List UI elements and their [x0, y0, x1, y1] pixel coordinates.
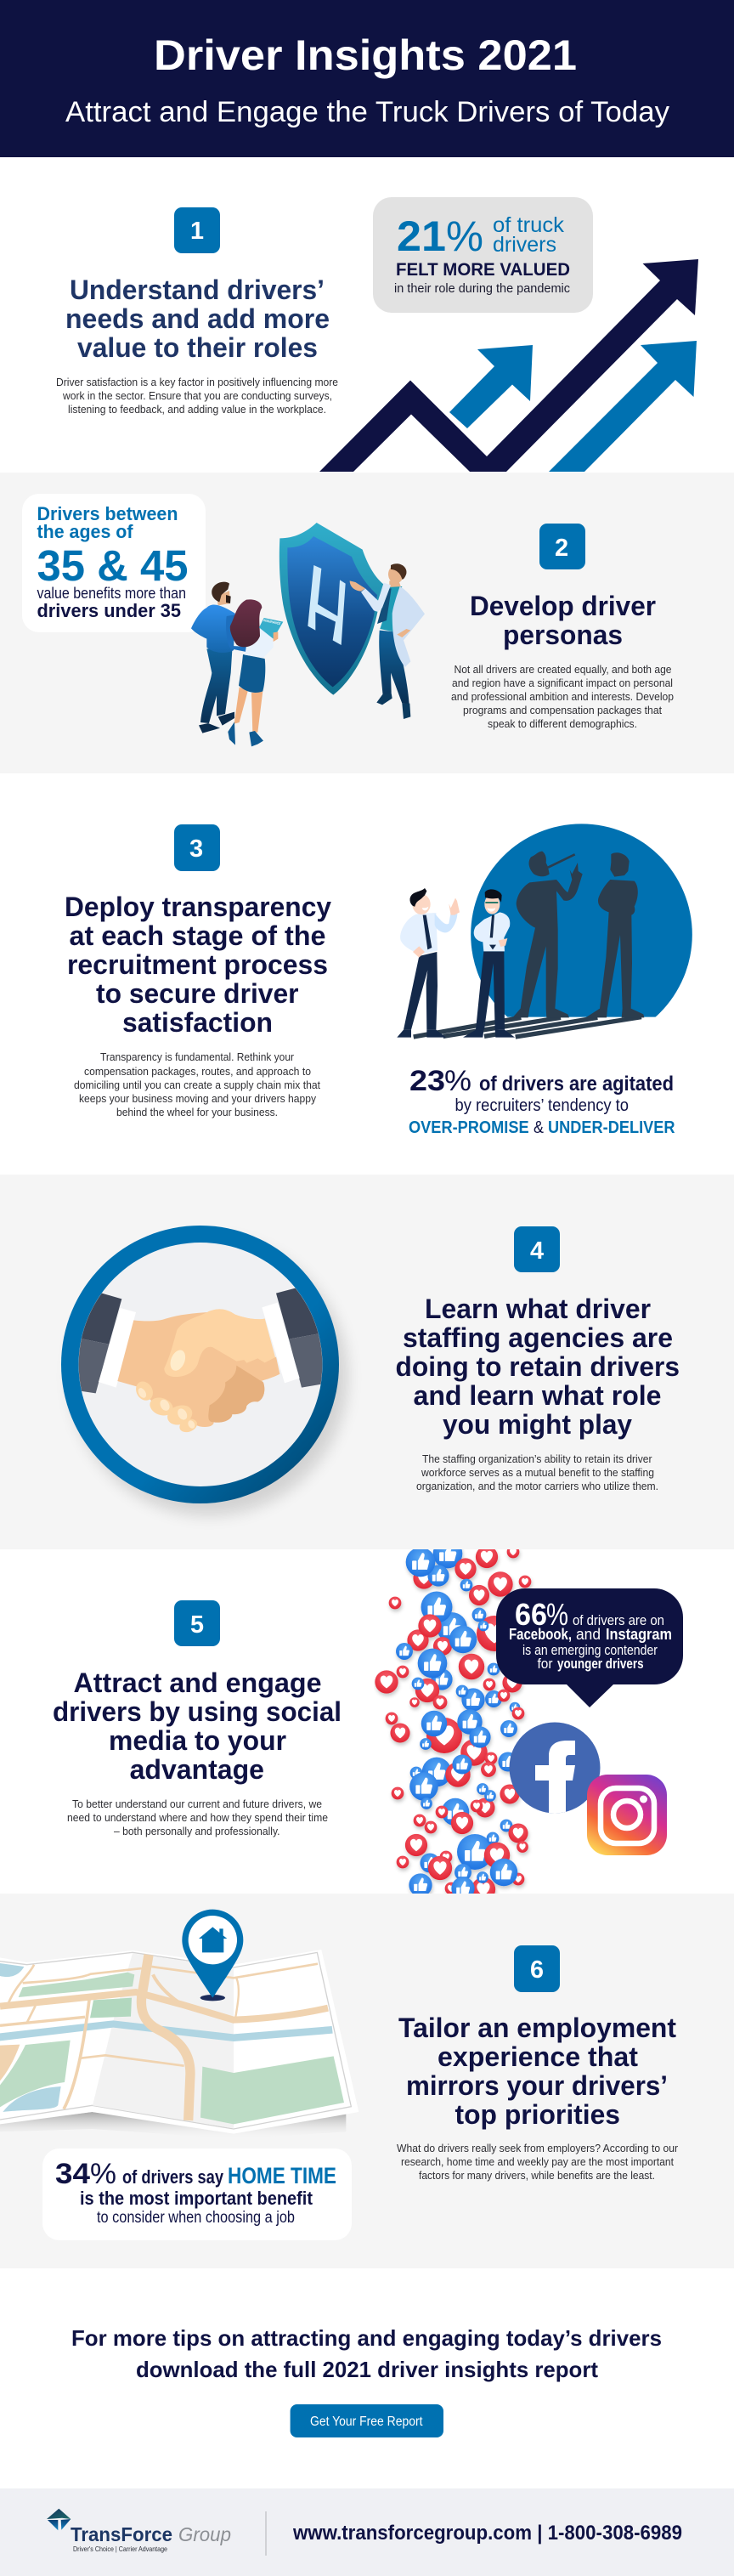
step 6 body text: What do drivers really seek from employers? According to our — [397, 2142, 679, 2154]
step 5 heading: media to your — [109, 1725, 286, 1756]
step 6 heading: Tailor an employment — [398, 2013, 676, 2043]
call to action heading: For more tips on attracting and engaging today’s drivers — [71, 2325, 662, 2351]
panel: step 2 — [22, 494, 674, 746]
illustration: recruiters and long-nosed shadows — [397, 824, 692, 1045]
man pointing — [397, 888, 460, 1038]
stat callout: 21%: 21 — [397, 212, 446, 260]
step 5 body text: To better understand our current and future drivers, we — [72, 1798, 322, 1810]
step 1 badge — [174, 207, 220, 253]
step 1 heading — [65, 275, 330, 363]
stat callout: ages 35 and 45 — [22, 494, 206, 632]
step 1 body text: work in the sector. Ensure that you are conducting surveys, — [62, 389, 332, 402]
step 4 body text: organization, and the motor carriers who utilize them. — [416, 1480, 658, 1492]
step 2 body text: programs and compensation packages that — [463, 704, 662, 716]
step 5 heading: Attract and engage — [73, 1667, 321, 1698]
contact details: www.transforcegroup.com | 1-800-308-6989 — [292, 2522, 682, 2545]
illustration: handshake in circle — [61, 1226, 347, 1515]
stat callout: 34%: 34 — [55, 2158, 90, 2190]
woman — [228, 599, 283, 746]
stat callout: ages 35 and 45: the ages of — [37, 521, 133, 542]
woman: INSURANCE — [263, 618, 281, 626]
TransForce Group logo: Driver's Choice | Carrier Advantage — [73, 2545, 167, 2553]
panel: step 4 — [61, 1226, 680, 1515]
panel: step 5 — [53, 1539, 683, 1901]
floor shadow stripes — [414, 1017, 641, 1037]
step 5 body text: – both personally and professionally. — [114, 1825, 280, 1837]
step 4 body text — [416, 1452, 658, 1492]
man — [191, 582, 257, 733]
handshake — [71, 1288, 331, 1435]
header banner — [0, 0, 734, 157]
stat callout: 34%: is the most important benefit — [80, 2188, 313, 2209]
stat callout: 34%: to consider when choosing a job — [97, 2209, 295, 2227]
step 4 heading — [396, 1294, 680, 1440]
step 6 badge — [514, 1945, 560, 1992]
step 6 badge: 6 — [530, 1956, 544, 1984]
step 5 body text: need to understand where and how they spend their time — [67, 1811, 328, 1824]
step 3 heading: to secure driver — [96, 978, 299, 1009]
step 3 heading — [65, 892, 331, 1038]
step 1 body text: listening to feedback, and adding value in the workplace. — [68, 403, 326, 416]
step 6 heading: experience that — [438, 2041, 638, 2072]
stat callout: 23%: UNDER-DELIVER — [548, 1118, 675, 1137]
stat callout: 23%: by recruiters’ tendency to — [455, 1096, 629, 1115]
stat callout: 23%: OVER-PROMISE — [409, 1118, 529, 1137]
step 5 badge: 5 — [190, 1611, 204, 1639]
icon: Facebook logo — [510, 1722, 600, 1819]
step 2 heading: personas — [503, 620, 623, 650]
step 4 heading: staffing agencies are — [403, 1322, 673, 1353]
step 6 heading: mirrors your drivers’ — [406, 2070, 668, 2101]
panel: step 1 — [56, 197, 698, 472]
step 3 heading: recruitment process — [67, 949, 328, 980]
step 2 body text: and professional ambition and interests. Develop — [451, 690, 674, 703]
step 1 heading: needs and add more — [65, 303, 330, 334]
TransForce Group logo — [47, 2509, 231, 2553]
stat callout: 23%: & — [534, 1118, 545, 1137]
stat callout: 34%: HOME TIME — [228, 2163, 336, 2188]
step 2 body text: Not all drivers are created equally, and both age — [454, 663, 671, 676]
shadow figure 1 — [512, 852, 583, 1017]
illustration: folded map with home pin — [0, 1910, 359, 2139]
stat callout: 21%: drivers — [493, 233, 556, 257]
panel: step 3 — [65, 824, 692, 1137]
step 4 body text: workforce serves as a mutual benefit to the staffing — [421, 1466, 654, 1479]
speech bubble: 66%: 66 — [515, 1597, 547, 1632]
step 2 body text: speak to different demographics. — [488, 717, 637, 730]
doctor — [350, 563, 425, 719]
stat callout: 21%: FELT MORE VALUED — [396, 260, 570, 280]
call to action heading: download the full 2021 driver insights report — [136, 2357, 598, 2382]
stat callout: 21%: % — [446, 212, 483, 260]
panel: call to action — [71, 2325, 662, 2437]
step 2 heading: Develop driver — [470, 591, 656, 621]
step 4 heading: and learn what role — [413, 1380, 661, 1411]
subtitle: Attract and Engage the Truck Drivers of Today — [65, 96, 669, 128]
step 3 body text: behind the wheel for your business. — [116, 1106, 278, 1118]
shield — [279, 523, 384, 695]
speech bubble: 66%: of drivers are on — [573, 1612, 664, 1628]
step 4 heading: you might play — [443, 1409, 632, 1440]
step 5 heading: drivers by using social — [53, 1696, 342, 1727]
TransForce Group logo: Group — [178, 2523, 231, 2545]
step 6 body text: research, home time and weekly pay are the most important — [401, 2155, 674, 2168]
speech bubble: 66% — [496, 1588, 683, 1707]
blue spotlight — [471, 824, 692, 1017]
speech bubble: 66%: younger drivers — [557, 1656, 644, 1672]
title: Driver Insights 2021 — [154, 31, 577, 79]
TransForce Group logo: TransForce — [71, 2523, 172, 2545]
footer — [0, 2488, 734, 2576]
step 6 body text: factors for many drivers, while benefits are the least. — [419, 2169, 655, 2182]
stat callout: ages 35 and 45: 35 & 45 — [37, 541, 189, 590]
step 4 badge: 4 — [530, 1237, 544, 1265]
step 3 body text: Transparency is fundamental. Rethink your — [100, 1050, 295, 1063]
stat callout: 23%: % — [444, 1065, 471, 1097]
man thinking — [463, 889, 515, 1038]
speech bubble: 66%: for — [537, 1656, 553, 1672]
stat callout: 21% — [373, 197, 593, 313]
step 5 heading — [53, 1667, 342, 1785]
icons: cascade of likes and hearts — [375, 1539, 531, 1901]
step 4 badge — [514, 1226, 560, 1272]
step 1 heading: value to their roles — [77, 332, 318, 363]
stat callout: 23%: of drivers are agitated — [479, 1073, 674, 1096]
step 1 body text — [56, 376, 338, 416]
panel: step 6 — [0, 1910, 679, 2240]
stat callout: 23%: 23 — [409, 1065, 445, 1097]
stat callout: 34% — [42, 2149, 352, 2240]
step 1 heading: Understand drivers’ — [70, 275, 325, 305]
step 5 badge — [174, 1600, 220, 1646]
stat callout: 34%: of drivers say — [122, 2166, 224, 2188]
step 6 heading — [398, 2013, 676, 2130]
step 3 body text: domiciling until you can create a supply chain mix that — [74, 1079, 320, 1091]
step 5 heading: advantage — [130, 1754, 264, 1785]
step 2 badge: 2 — [555, 535, 568, 562]
call to action heading — [71, 2325, 662, 2382]
stat callout: 23% — [409, 1065, 675, 1137]
stat callout: ages 35 and 45: Drivers between — [37, 503, 178, 524]
stat callout: ages 35 and 45: drivers under 35 — [37, 600, 181, 621]
step 1 body text: Driver satisfaction is a key factor in positively influencing more — [56, 376, 338, 388]
stat callout: ages 35 and 45: value benefits more than — [37, 584, 186, 602]
speech bubble: 66%: is an emerging contender — [522, 1642, 658, 1658]
icon: home location pin — [182, 1910, 243, 2001]
illustration: shield with couple and doctor — [191, 523, 425, 746]
step 3 badge: 3 — [189, 835, 203, 863]
shadow figure 2 — [585, 852, 644, 1017]
step 6 heading: top priorities — [455, 2099, 620, 2130]
step 2 heading — [470, 591, 656, 650]
speech bubble: 66%: Facebook, — [509, 1626, 572, 1643]
step 2 body text — [451, 663, 674, 730]
step 2 badge — [539, 524, 585, 569]
step 5 body text — [67, 1798, 328, 1837]
step 4 body text: The staffing organization’s ability to retain its driver — [422, 1452, 652, 1465]
step 3 body text: compensation packages, routes, and approach to — [84, 1065, 311, 1078]
step 6 body text — [397, 2142, 679, 2182]
speech bubble: 66%: Instagram — [606, 1626, 672, 1643]
step 3 heading: satisfaction — [122, 1007, 273, 1038]
step 3 heading: Deploy transparency — [65, 892, 331, 922]
icon: Instagram logo — [587, 1775, 667, 1855]
button: Get Your Free Report — [310, 2415, 423, 2429]
button — [291, 2404, 443, 2437]
step 3 badge — [174, 824, 220, 871]
stat callout: 21%: in their role during the pandemic — [394, 281, 570, 296]
speech bubble: 66%: and — [576, 1626, 601, 1643]
step 1 badge: 1 — [190, 218, 204, 245]
step 3 heading: at each stage of the — [70, 920, 326, 951]
step 3 body text: keeps your business moving and your drivers happy — [79, 1092, 316, 1105]
step 3 body text — [74, 1050, 320, 1118]
stat callout: 34%: % — [90, 2158, 116, 2190]
speech bubble: 66%: % — [546, 1597, 568, 1632]
stat callout: 21%: of truck — [493, 213, 564, 237]
step 4 heading: doing to retain drivers — [396, 1351, 680, 1382]
step 2 body text: and region have a significant impact on personal — [452, 677, 673, 689]
icon: growth arrows — [319, 259, 698, 472]
step 4 heading: Learn what driver — [425, 1294, 651, 1324]
